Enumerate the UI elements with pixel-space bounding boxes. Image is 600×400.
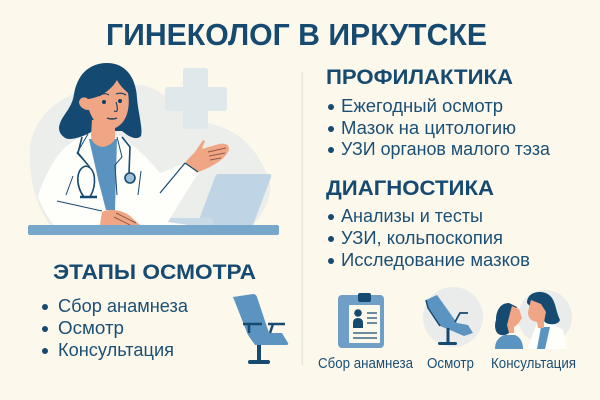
step: консультация: [491, 290, 576, 372]
icon: exam chair: [233, 294, 288, 364]
doctor figure: [527, 323, 567, 349]
caption: Сбор анамнеза: [318, 355, 414, 372]
list: [328, 96, 551, 159]
list: Анализы и тесты: [341, 206, 483, 226]
icon: clipboard: [338, 293, 384, 348]
list: [42, 296, 189, 360]
caption: Консультация: [491, 355, 576, 372]
resting hand: [100, 210, 140, 225]
neck: [91, 120, 115, 147]
white coat: [38, 133, 199, 226]
list: Сбор анамнеза: [58, 296, 189, 316]
laptop: [153, 174, 271, 226]
icon: chair in circle: [423, 287, 483, 347]
icon: medical cross: [165, 68, 227, 129]
section: этапы осмотра: [42, 261, 288, 364]
section: диагностика: [326, 177, 530, 270]
illustration: doctor at desk: [28, 63, 279, 235]
heading: ЭТАПЫ ОСМОТРА: [53, 261, 256, 284]
heading: ПРОФИЛАКТИКА: [326, 66, 513, 89]
background blob: [30, 85, 270, 225]
desk: [28, 225, 279, 235]
section: профилактика: [326, 66, 551, 159]
doctor: [38, 63, 229, 226]
step: осмотр: [423, 287, 483, 372]
stethoscope: [78, 137, 135, 197]
title: ГИНЕКОЛОГ В ИРКУТСКЕ: [106, 17, 487, 52]
facial features: [99, 93, 126, 119]
patient figure: [495, 335, 523, 349]
heading: ДИАГНОСТИКА: [326, 177, 494, 200]
blue shirt: [89, 139, 117, 210]
list: УЗИ органов малого тэза: [341, 139, 551, 159]
list: Осмотр: [58, 318, 124, 338]
caption: Осмотр: [427, 355, 474, 372]
list: [328, 206, 530, 270]
hair: [59, 63, 141, 139]
face: [79, 80, 129, 129]
coat lines: [57, 134, 141, 211]
list: Ежегодный осмотр: [341, 96, 503, 116]
step: сбор анамнеза: [318, 293, 414, 372]
list: УЗИ, кольпоскопия: [341, 228, 503, 248]
hand pointing: [185, 140, 229, 172]
icon: doctor and patient: [495, 290, 572, 349]
list: Исследование мазков: [341, 250, 530, 270]
list: Мазок на цитологию: [341, 118, 516, 138]
list: Консультация: [58, 340, 174, 360]
